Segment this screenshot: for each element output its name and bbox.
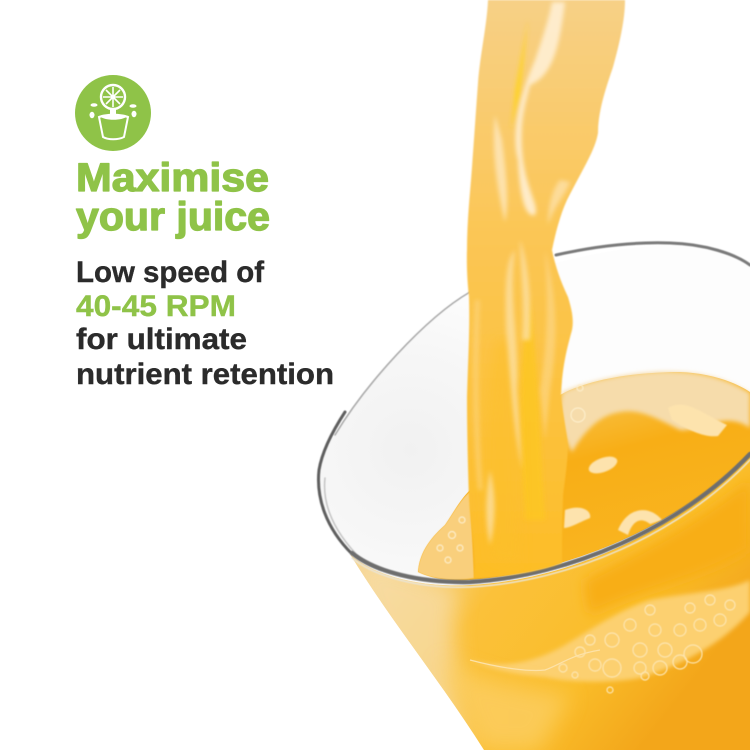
stream of juice bbox=[467, 0, 625, 578]
icon: juice cup with citrus slice bbox=[75, 75, 151, 151]
body text: nutrient retention bbox=[76, 358, 334, 391]
juice drip bbox=[110, 108, 116, 119]
darker orange core bbox=[585, 480, 750, 615]
body text: Low speed of bbox=[76, 256, 265, 289]
meniscus line on glass bbox=[470, 650, 600, 671]
body text: for ultimate bbox=[76, 323, 247, 356]
splashes bbox=[90, 103, 136, 118]
illustration: juice poured into glass bbox=[318, 0, 750, 750]
body text bbox=[76, 256, 334, 391]
stream highlights bbox=[494, 2, 570, 225]
heading: your juice bbox=[76, 195, 270, 239]
pale juice band below froth bbox=[459, 666, 572, 750]
pale left side of glass bbox=[356, 562, 477, 738]
glass body with juice bbox=[340, 450, 750, 750]
foam bubbles behind stream bbox=[437, 385, 585, 563]
bubbles on glass bbox=[559, 595, 735, 693]
heading: Maximise bbox=[76, 156, 269, 200]
heading bbox=[76, 156, 270, 239]
cup bbox=[99, 116, 128, 139]
body text: 40-45 RPM bbox=[76, 290, 236, 323]
surface highlights bbox=[564, 405, 727, 535]
foam on surface bbox=[560, 372, 750, 452]
froth band on glass bbox=[470, 580, 750, 682]
lower stream highlights bbox=[473, 240, 555, 545]
juice surface bbox=[418, 372, 750, 581]
glass rim bbox=[318, 243, 750, 587]
foam behind stream, left bbox=[418, 492, 474, 580]
golden streak bbox=[520, 300, 545, 520]
glass inner wall bbox=[319, 245, 750, 582]
citrus slice bbox=[101, 85, 125, 109]
